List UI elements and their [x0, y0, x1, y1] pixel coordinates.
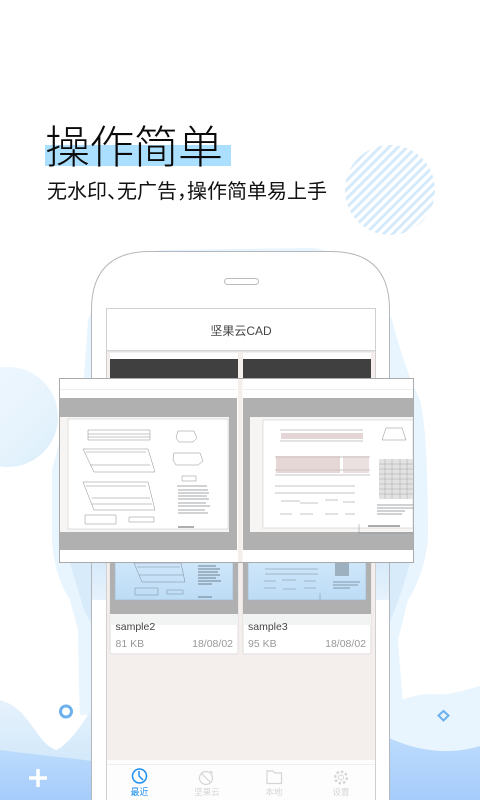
top file cards	[110, 353, 371, 383]
background: bottom waves	[0, 686, 480, 800]
background: left circle	[0, 367, 58, 467]
file card: sample3: sample3	[248, 621, 288, 633]
file card: sample3	[243, 555, 371, 654]
bottom navigation	[107, 760, 375, 800]
background: pale blue glow behind phone	[52, 248, 428, 715]
nav label: local: 本地	[265, 787, 283, 797]
file card: sample2	[110, 555, 238, 654]
phone speaker	[224, 278, 258, 284]
title: 操作简单	[45, 122, 223, 173]
file card: sample3: 95 KB	[248, 638, 277, 650]
file card: sample2: 81 KB	[116, 638, 144, 650]
nav label: cloud: 坚果云	[194, 787, 220, 797]
phone body	[92, 252, 390, 800]
nav label: recent: 最近	[130, 786, 149, 797]
enlarged preview overlay	[60, 378, 414, 562]
decoration: striped circle	[345, 145, 435, 235]
file card: sample2: 18/08/02	[192, 638, 233, 650]
file card: sample2: sample2	[116, 621, 155, 633]
nav icon: clock	[132, 769, 146, 783]
background: darker glow tones beside phone	[70, 563, 410, 625]
heading highlight	[45, 145, 231, 166]
nav icon: folder	[267, 771, 282, 784]
app header: 坚果云CAD	[210, 324, 272, 338]
app screen	[106, 308, 376, 800]
app header	[107, 309, 375, 352]
file card: sample3: 18/08/02	[325, 638, 366, 650]
decoration: plus	[29, 769, 47, 787]
nav icon: gear	[335, 772, 347, 783]
preview: drawing two	[243, 398, 413, 550]
decoration: diamond	[438, 711, 448, 720]
nav label: settings: 设置	[332, 787, 350, 797]
nav icon: nut	[200, 771, 213, 784]
subtitle: 无水印、无广告，操作简单易上手	[47, 180, 327, 203]
decoration: hollow circle	[60, 706, 72, 717]
preview: drawing one	[60, 398, 237, 550]
